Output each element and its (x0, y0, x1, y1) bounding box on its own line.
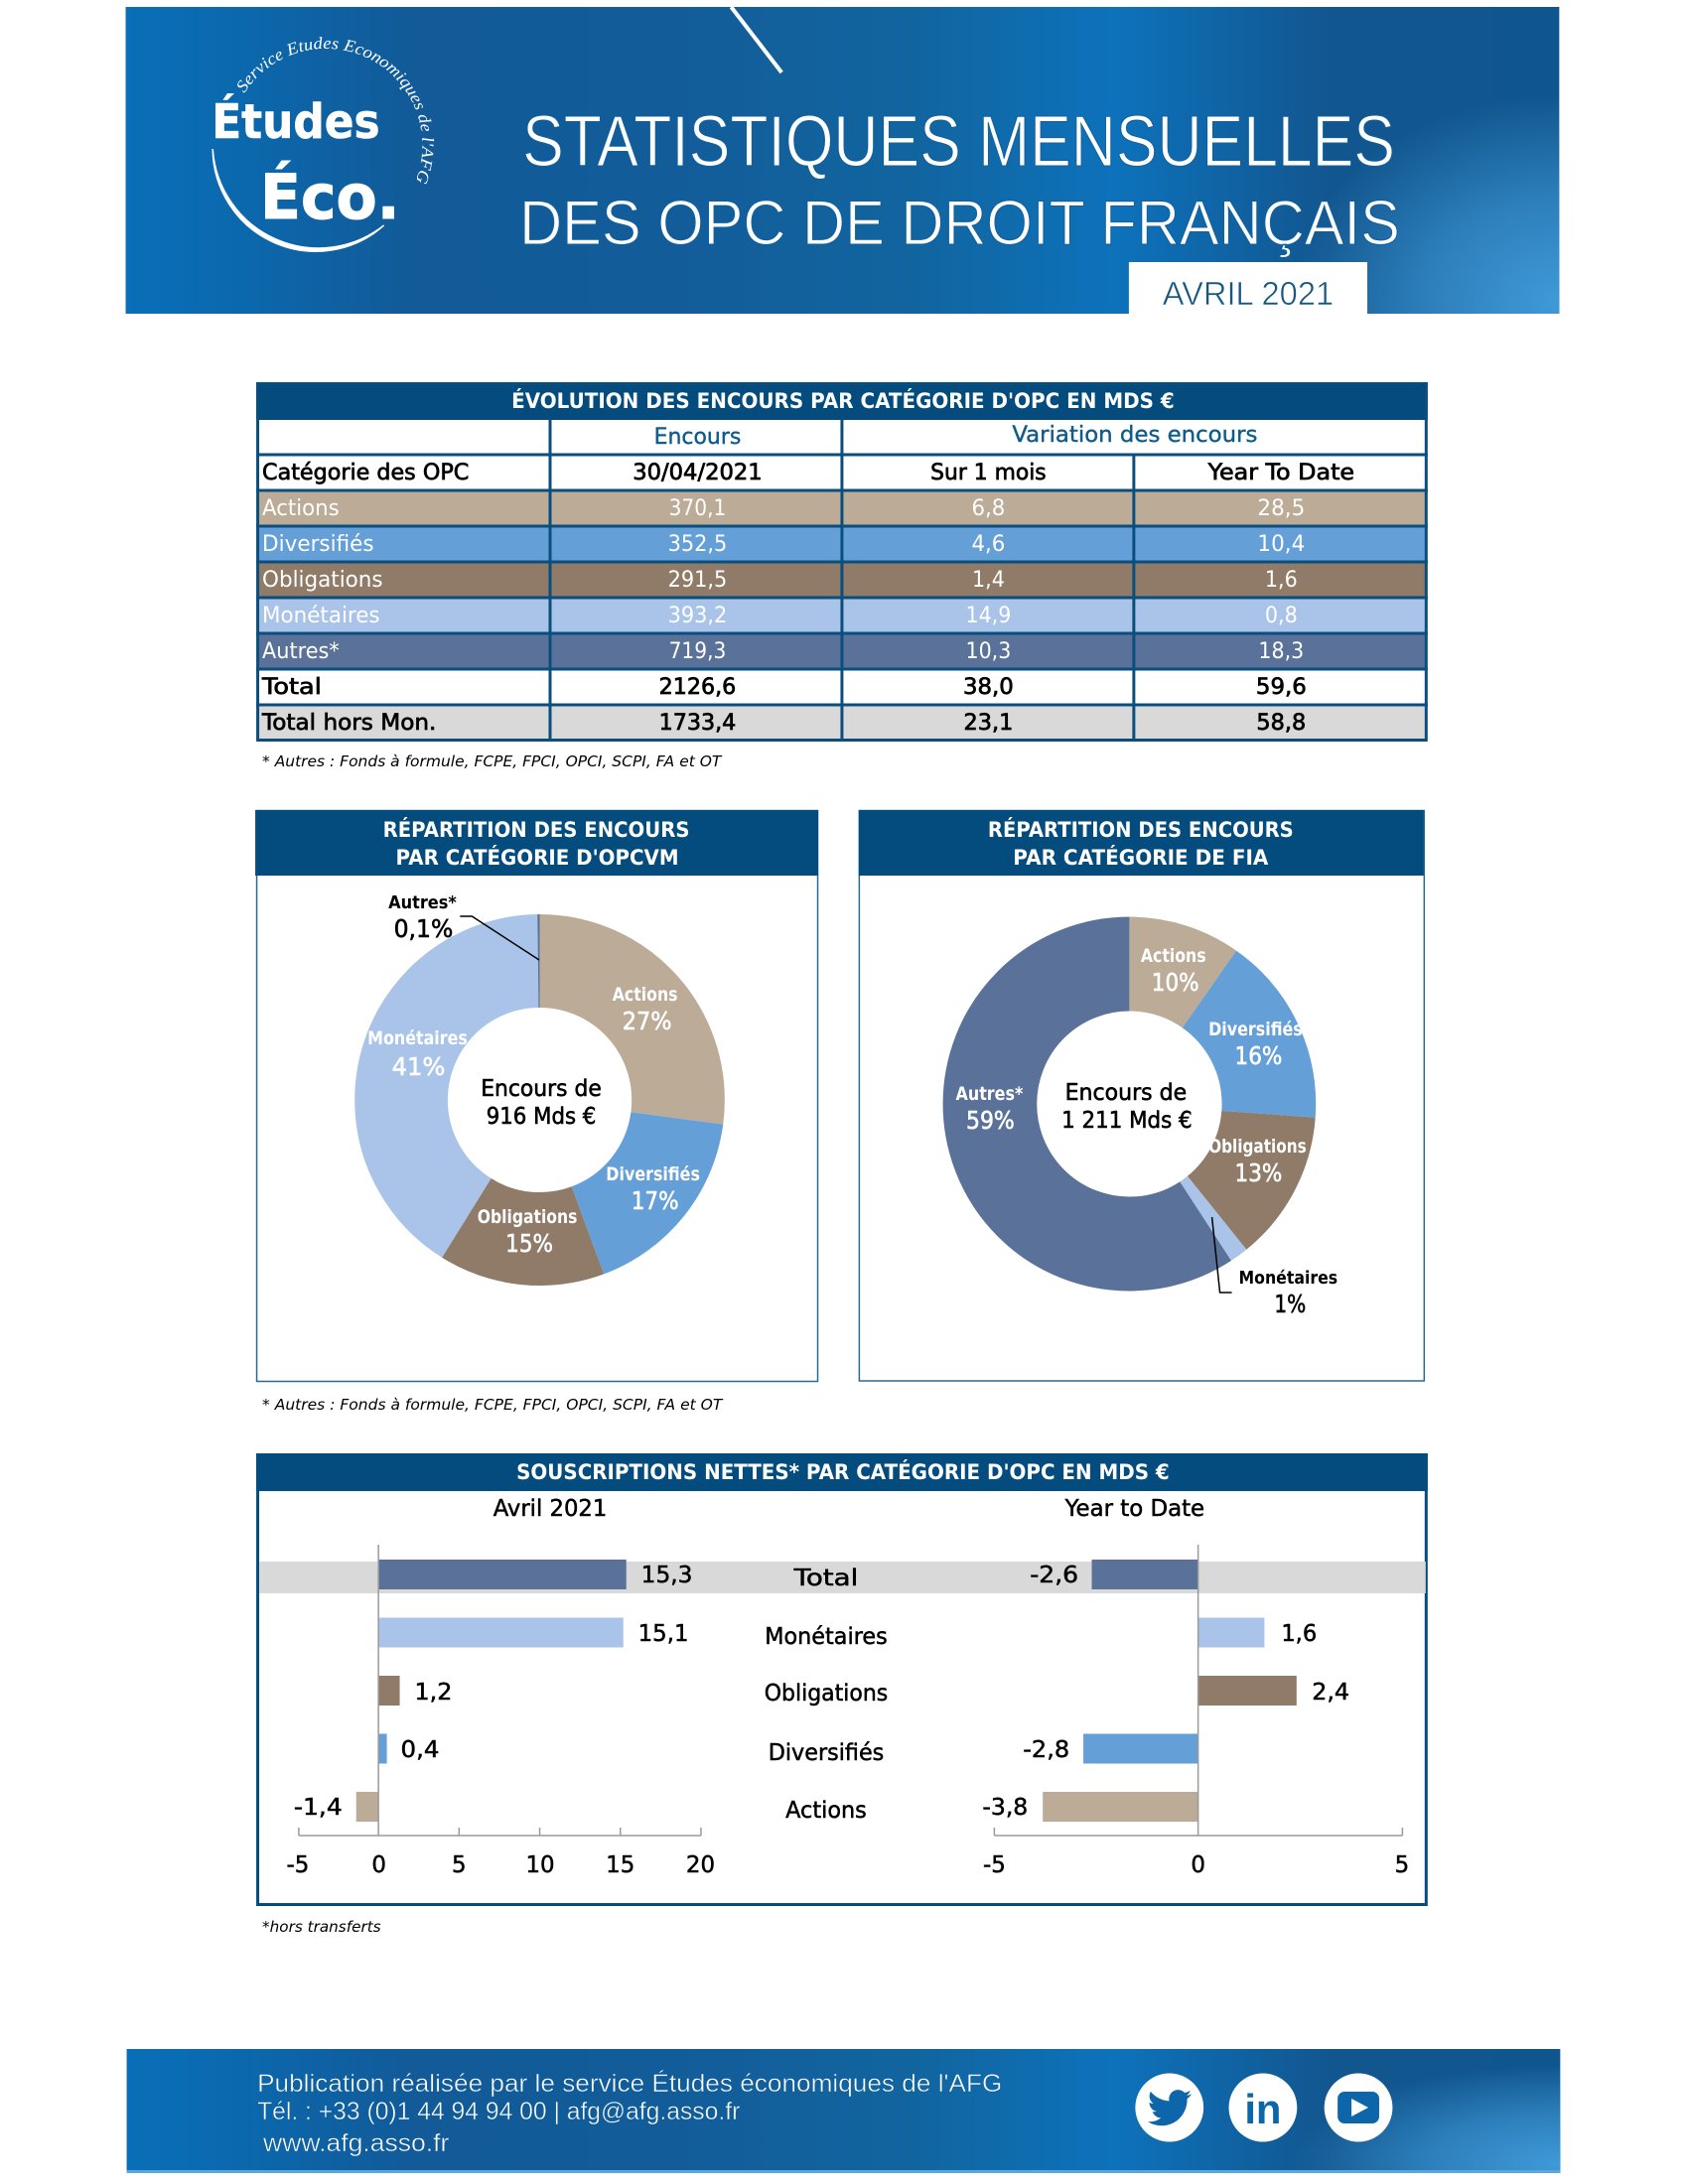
logo Études Éco (211, 37, 435, 252)
slice labels FIA: Autres* (956, 1083, 1023, 1105)
row obligations: 1,4 (972, 568, 1005, 593)
value labels: -1,4 (294, 1795, 343, 1821)
logo Études Éco: Service Etudes Economiques de l'AFG (237, 37, 435, 185)
panel heading: PAR CATÉGORIE DE FIA (1013, 845, 1269, 870)
icon: twitter (1135, 2073, 1203, 2142)
row monétaires: 393,2 (668, 604, 727, 628)
axis labels: -5 (983, 1852, 1006, 1878)
slice labels OPCVM: 41% (392, 1052, 445, 1081)
value labels: 15,1 (638, 1621, 688, 1647)
date tab: AVRIL 2021 (1163, 275, 1334, 312)
panel heading: SOUSCRIPTIONS NETTES* PAR CATÉGORIE D'OPC EN MDS € (516, 1459, 1170, 1484)
slice labels FIA: Monétaires (1238, 1268, 1337, 1289)
axis labels (287, 1852, 715, 1878)
bar chart: year to date (982, 1545, 1409, 1878)
value labels: -2,6 (1030, 1563, 1078, 1588)
logo Études Éco: Éco. (260, 161, 400, 233)
table footnote: * Autres : Fonds à formule, FCPE, FPCI, OPCI, SCPI, FA et OT (262, 752, 723, 770)
panel: FIA donut (859, 810, 1424, 1381)
value labels: 1,6 (1281, 1621, 1317, 1647)
donut chart FIA (990, 964, 1269, 1244)
column headers: 30/04/2021 (633, 461, 763, 485)
slice labels OPCVM: Autres* (388, 892, 457, 913)
row obligations: 291,5 (668, 568, 727, 593)
value labels: -3,8 (982, 1795, 1028, 1821)
slice labels OPCVM: 15% (505, 1229, 553, 1258)
row autres (262, 639, 1304, 664)
row total hors monétaires (261, 711, 1306, 736)
column headers: Variation des encours (1012, 423, 1257, 448)
row monétaires: 0,8 (1265, 604, 1298, 628)
row actions: 6,8 (971, 496, 1005, 521)
panel heading: RÉPARTITION DES ENCOURS (383, 817, 689, 842)
donut center text (481, 1076, 602, 1130)
donut chart OPCVM (401, 961, 678, 1239)
axis labels: 0 (371, 1852, 386, 1878)
slice labels OPCVM: 27% (623, 1007, 672, 1035)
donut center text: 916 Mds € (487, 1104, 596, 1130)
donut center text: Encours de (1065, 1080, 1187, 1106)
slice labels OPCVM: Obligations (478, 1206, 577, 1228)
panel heading (256, 1453, 1428, 1491)
row total: Total (261, 675, 322, 700)
row autres: 719,3 (669, 639, 726, 664)
row diversifiés: 4,6 (971, 532, 1005, 557)
row obligations: Obligations (262, 568, 383, 593)
footer text: Tél. : +33 (0)1 44 94 94 00 | afg@afg.asso.fr (257, 2098, 740, 2125)
axis labels (983, 1852, 1409, 1878)
slice labels OPCVM: 0,1% (394, 914, 453, 943)
column headers: Sur 1 mois (930, 461, 1047, 485)
title: STATISTIQUES MENSUELLES (522, 102, 1395, 182)
value labels (294, 1563, 692, 1821)
panel heading (255, 810, 818, 876)
footer text: Publication réalisée par le service Études économiques de l'AFG (257, 2069, 1002, 2098)
title (519, 102, 1400, 258)
category labels: Monétaires (765, 1624, 888, 1650)
panel heading: RÉPARTITION DES ENCOURS (988, 817, 1294, 842)
slice labels FIA: 10% (1152, 968, 1199, 997)
row total: 2126,6 (659, 675, 736, 700)
slice labels FIA: 16% (1235, 1041, 1282, 1070)
donut center text (1061, 1080, 1193, 1134)
slice labels FIA: Diversifiés (1208, 1019, 1303, 1040)
row total hors monétaires: 58,8 (1256, 711, 1306, 736)
axis labels: 10 (525, 1852, 555, 1878)
value labels: 2,4 (1312, 1680, 1349, 1706)
category labels: Obligations (765, 1681, 888, 1706)
footer text: www.afg.asso.fr (262, 2129, 449, 2157)
row diversifiés: 10,4 (1257, 532, 1305, 557)
footer banner (127, 2049, 1560, 2173)
slice labels FIA: 13% (1235, 1159, 1282, 1187)
value labels: -2,8 (1023, 1737, 1069, 1763)
table: évolution des encours (256, 382, 1428, 742)
bar chart: avril 2021 (287, 1545, 715, 1878)
slice labels FIA: 1% (1274, 1290, 1306, 1318)
row total hors monétaires: 23,1 (963, 711, 1013, 736)
icon: linkedin (1229, 2073, 1297, 2142)
row autres: Autres* (262, 639, 340, 664)
row diversifiés (262, 532, 1305, 557)
row total hors monétaires: Total hors Mon. (261, 711, 436, 736)
slice labels FIA: 59% (966, 1106, 1015, 1135)
value labels: 15,3 (641, 1563, 692, 1588)
footer text (257, 2069, 1002, 2157)
slice labels OPCVM: Monétaires (367, 1027, 468, 1049)
axis labels: 0 (1191, 1852, 1205, 1878)
header banner (125, 7, 1559, 314)
table title: ÉVOLUTION DES ENCOURS PAR CATÉGORIE D'OPC EN MDS € (511, 388, 1175, 413)
value labels: 0,4 (401, 1737, 439, 1763)
panel heading (859, 810, 1424, 876)
row monétaires: 14,9 (965, 604, 1011, 628)
column headers: Catégorie des OPC (262, 461, 469, 485)
axis labels: -5 (287, 1852, 309, 1878)
date tab (1129, 262, 1367, 314)
axis labels: 5 (452, 1852, 467, 1878)
category labels: Total (792, 1566, 858, 1591)
leader line autres (460, 916, 539, 960)
bar chart footnote: *hors transferts (262, 1918, 381, 1936)
leader line monétaires (1212, 1217, 1232, 1293)
chart subtitles: Year to Date (1064, 1496, 1204, 1522)
panel: OPCVM donut (255, 810, 818, 1382)
slice labels FIA: Actions (1141, 945, 1206, 967)
row monétaires (262, 604, 1298, 628)
donut center text: Encours de (481, 1076, 602, 1102)
decorative slash (731, 7, 781, 72)
panel heading: PAR CATÉGORIE D'OPCVM (396, 845, 679, 870)
row obligations: 1,6 (1265, 568, 1298, 593)
slice labels OPCVM (367, 892, 700, 1258)
icon: linkedin: in (1244, 2086, 1281, 2132)
row actions (262, 496, 1305, 521)
row obligations (262, 568, 1298, 593)
slice labels OPCVM: Diversifiés (606, 1163, 700, 1185)
column headers: Year To Date (1207, 461, 1354, 485)
row monétaires: Monétaires (262, 604, 380, 628)
slice labels FIA: Obligations (1208, 1136, 1307, 1158)
value labels (982, 1563, 1349, 1821)
axis labels: 20 (686, 1852, 715, 1878)
logo Études Éco: Études (211, 93, 380, 150)
total band (259, 1562, 1426, 1593)
row total hors monétaires: 1733,4 (659, 711, 736, 736)
panel footnote: * Autres : Fonds à formule, FCPE, FPCI, OPCI, SCPI, FA et OT (262, 1396, 724, 1414)
slice labels FIA (956, 945, 1337, 1318)
row diversifiés: Diversifiés (262, 532, 374, 557)
slice labels OPCVM: 17% (632, 1186, 679, 1215)
category labels (765, 1566, 888, 1824)
row total: 38,0 (963, 675, 1014, 700)
row actions: Actions (262, 496, 340, 521)
axis labels: 15 (606, 1852, 634, 1878)
row total (261, 675, 1307, 700)
row autres: 10,3 (965, 639, 1011, 664)
chart subtitles (493, 1496, 1204, 1522)
category labels: Actions (785, 1798, 867, 1824)
row total: 59,6 (1256, 675, 1307, 700)
column headers (262, 423, 1354, 485)
row autres: 18,3 (1258, 639, 1304, 664)
row actions: 28,5 (1257, 496, 1305, 521)
value labels: 1,2 (414, 1680, 452, 1706)
column headers: Encours (654, 425, 741, 450)
icon: youtube (1325, 2073, 1392, 2142)
title: DES OPC DE DROIT FRANÇAIS (519, 189, 1400, 258)
slice labels OPCVM: Actions (613, 984, 678, 1006)
axis labels: 5 (1395, 1852, 1409, 1878)
panel: souscriptions nettes (256, 1453, 1428, 1904)
chart subtitles: Avril 2021 (493, 1496, 607, 1522)
row diversifiés: 352,5 (668, 532, 727, 557)
row actions: 370,1 (669, 496, 726, 521)
donut center text: 1 211 Mds € (1061, 1108, 1193, 1134)
category labels: Diversifiés (769, 1740, 884, 1766)
